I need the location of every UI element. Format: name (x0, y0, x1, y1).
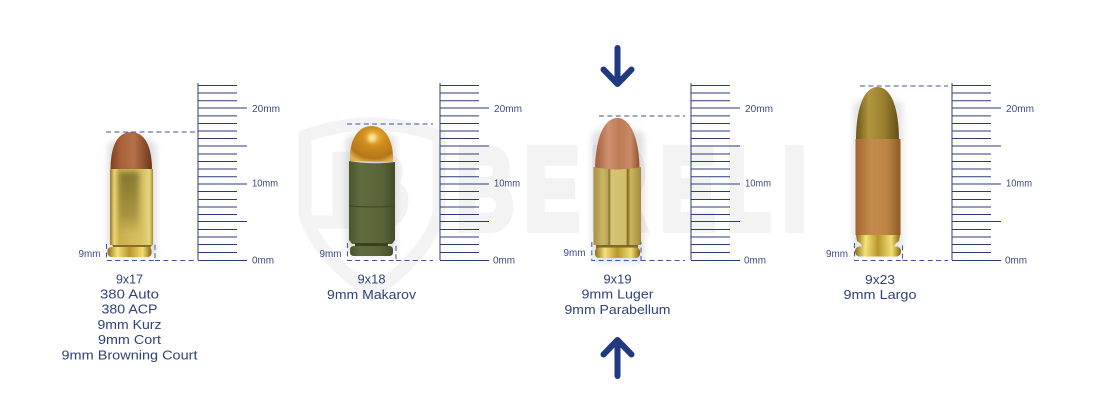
caption: 9x17 names: 380 ACP (102, 302, 158, 316)
arrow: down (604, 48, 632, 84)
panel: 9x23 (826, 83, 1034, 302)
watermark: wordmark (456, 124, 806, 254)
dimension lines: 9x17 (106, 132, 197, 260)
caption: 9x19 names: 9mm Parabellum (564, 303, 670, 317)
watermark: wordmark: I (782, 124, 806, 254)
label: 9mm width: 9mm (564, 248, 586, 259)
caption: 9x23 names: 9mm Largo (844, 288, 917, 302)
panel: 9x17 (62, 83, 280, 362)
caption: 9x19 names (564, 272, 670, 317)
caption: 9x19 names: 9x19 (604, 272, 632, 286)
caption: 9x17 names: 9mm Kurz (98, 318, 162, 332)
ruler: 9x23 (952, 83, 1034, 266)
ruler: 9x23: 20mm (1006, 104, 1034, 115)
caption: 9x18 names: 9x18 (358, 272, 386, 286)
caption: 9x19 names: 9mm Luger (582, 288, 654, 302)
ruler: 9x19: 20mm (745, 104, 773, 115)
caption: 9x17 names (62, 272, 198, 362)
watermark: wordmark: E (660, 124, 716, 254)
ruler: 9x18: 0mm (493, 256, 515, 266)
bullet: 9x17 (108, 132, 156, 258)
ruler: 9x19: 0mm (744, 256, 766, 266)
caption: 9x17 names: 9mm Browning Court (62, 348, 198, 362)
ruler: 9x18: 20mm (494, 104, 522, 115)
caption: 9x17 names: 9x17 (116, 272, 143, 286)
bullet: 9x23 (853, 87, 903, 256)
watermark: wordmark: L (726, 124, 770, 254)
caption: 9x18 names (327, 272, 417, 302)
bullet: 9x18 (346, 126, 396, 256)
watermark: wordmark: E (524, 124, 580, 254)
dimension lines: 9x23 (854, 86, 948, 260)
ruler: 9x19: 10mm (745, 178, 771, 190)
panel: 9x19 (564, 83, 773, 317)
ruler: 9x17: 10mm (252, 178, 278, 190)
label: 9mm width: 9mm (826, 249, 848, 260)
bullet: 9x19 (592, 118, 644, 262)
watermark: Bereli logo (305, 124, 806, 294)
ruler: 9x19 (691, 83, 773, 266)
caption: 9x17 names: 380 Auto (100, 288, 159, 302)
ruler: 9x17: 0mm (252, 256, 274, 266)
ruler: 9x18: 10mm (494, 178, 520, 190)
dimension lines: 9x19 (592, 116, 685, 260)
arrow: up (604, 340, 632, 376)
ruler: 9x17: 20mm (252, 104, 280, 115)
caption: 9x17 names: 9mm Cort (98, 333, 162, 347)
watermark: shield (305, 124, 439, 294)
watermark: wordmark: R (590, 124, 647, 254)
dimension lines: 9x18 (347, 124, 433, 260)
ruler: 9x18 (440, 83, 522, 266)
label: 9mm width: 9mm (78, 249, 100, 260)
caption: 9x23 names (844, 273, 917, 302)
caption: 9x23 names: 9x23 (865, 273, 895, 287)
caption: 9x18 names: 9mm Makarov (327, 288, 417, 302)
watermark: wordmark: B (456, 124, 514, 254)
panel: 9x18 (320, 83, 522, 302)
ruler: 9x23: 0mm (1005, 256, 1027, 266)
ruler: 9x23: 10mm (1006, 178, 1032, 190)
ruler: 9x17 (198, 83, 280, 266)
label: 9mm width: 9mm (320, 249, 342, 260)
